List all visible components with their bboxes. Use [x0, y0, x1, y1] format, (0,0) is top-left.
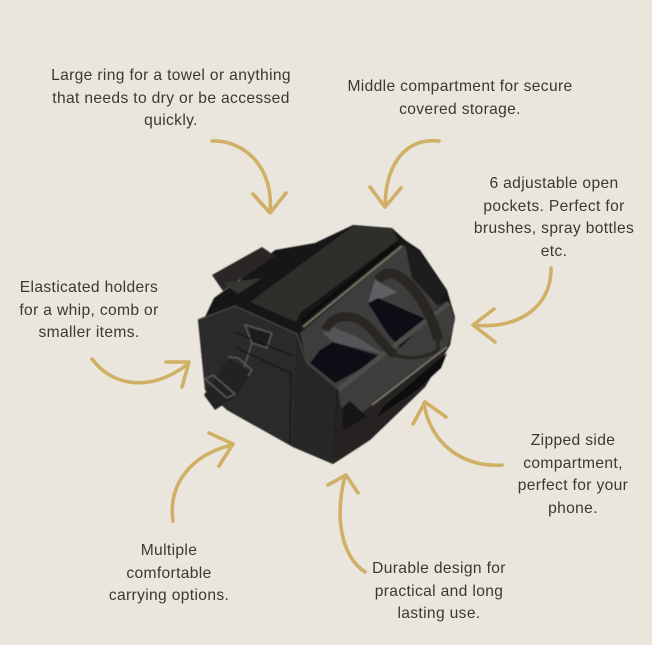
- text: open pockets: brushes, spray bottles: [474, 220, 634, 237]
- pocket rim: [338, 303, 449, 390]
- text: middle compartment: Middle compartment for secure: [347, 78, 573, 95]
- side zip opening: [377, 353, 447, 417]
- front end panel: [293, 334, 337, 464]
- text: large ring: [51, 67, 291, 129]
- inner pocket wall: [300, 245, 447, 390]
- arrow: large ring: [212, 141, 286, 213]
- text: elasticated holders: smaller items.: [38, 324, 140, 341]
- lower side panel: [333, 310, 455, 464]
- text: open pockets: etc.: [541, 242, 567, 260]
- text: middle compartment: covered storage.: [399, 100, 521, 118]
- text: large ring: Large ring for a towel or anything: [51, 67, 291, 84]
- open pocket: far: [368, 298, 428, 348]
- text: carrying options: carrying options.: [109, 587, 229, 604]
- far end interior: [405, 243, 447, 308]
- arrow: zipped side compartment: [413, 402, 502, 465]
- text: carrying options: Multiple: [141, 542, 197, 559]
- text: zipped side compartment: perfect for your: [518, 477, 628, 494]
- text: zipped side compartment: phone.: [548, 500, 598, 516]
- strap webbing: [204, 358, 251, 410]
- top lid: [250, 226, 398, 322]
- handle tab: [223, 278, 262, 294]
- text: large ring: quickly.: [144, 112, 198, 129]
- zip pull: [342, 401, 367, 430]
- left end panel: [198, 306, 297, 447]
- side zip line: [372, 347, 447, 405]
- end pocket seams: [235, 332, 293, 445]
- arrow: elasticated holders: [92, 359, 189, 387]
- text: large ring: that needs to dry or be accessed: [52, 90, 290, 106]
- arrow: durable design: [328, 475, 365, 572]
- arrow: middle compartment: [370, 141, 439, 207]
- lid zip: [302, 243, 402, 327]
- handle near: [325, 316, 438, 358]
- text: elasticated holders: [19, 279, 159, 341]
- text: carrying options: [109, 542, 229, 604]
- text: middle compartment: [347, 78, 573, 118]
- strap fitting: [247, 326, 270, 347]
- text: zipped side compartment: Zipped side: [531, 432, 615, 449]
- text: durable design: Durable design for: [372, 560, 506, 577]
- strap buckle: [205, 325, 272, 398]
- text: open pockets: [474, 175, 634, 260]
- text: elasticated holders: Elasticated holders: [20, 279, 158, 296]
- text: durable design: lasting use.: [397, 605, 481, 622]
- upper side band: [338, 305, 455, 426]
- blue-grey divider far: [368, 280, 397, 303]
- text: open pockets: 6 adjustable open: [489, 175, 619, 192]
- arrow: carrying options: [172, 433, 233, 521]
- arrow: open pockets: [473, 268, 551, 342]
- text: zipped side compartment: [518, 432, 628, 516]
- text: zipped side compartment: compartment,: [523, 454, 623, 472]
- text: carrying options: comfortable: [126, 564, 212, 582]
- text: elasticated holders: for a whip, comb or: [19, 302, 159, 318]
- bag silhouette: [198, 225, 455, 464]
- handle far: [378, 273, 438, 350]
- bag: [198, 225, 455, 464]
- open pocket: near: [310, 342, 383, 383]
- text: durable design: practical and long: [375, 582, 503, 600]
- carry handle pad: [212, 247, 275, 291]
- text: durable design: [372, 560, 506, 622]
- upper edge highlight: [198, 306, 337, 388]
- text: open pockets: pockets. Perfect for: [483, 198, 625, 214]
- blue-grey divider near: [323, 327, 385, 355]
